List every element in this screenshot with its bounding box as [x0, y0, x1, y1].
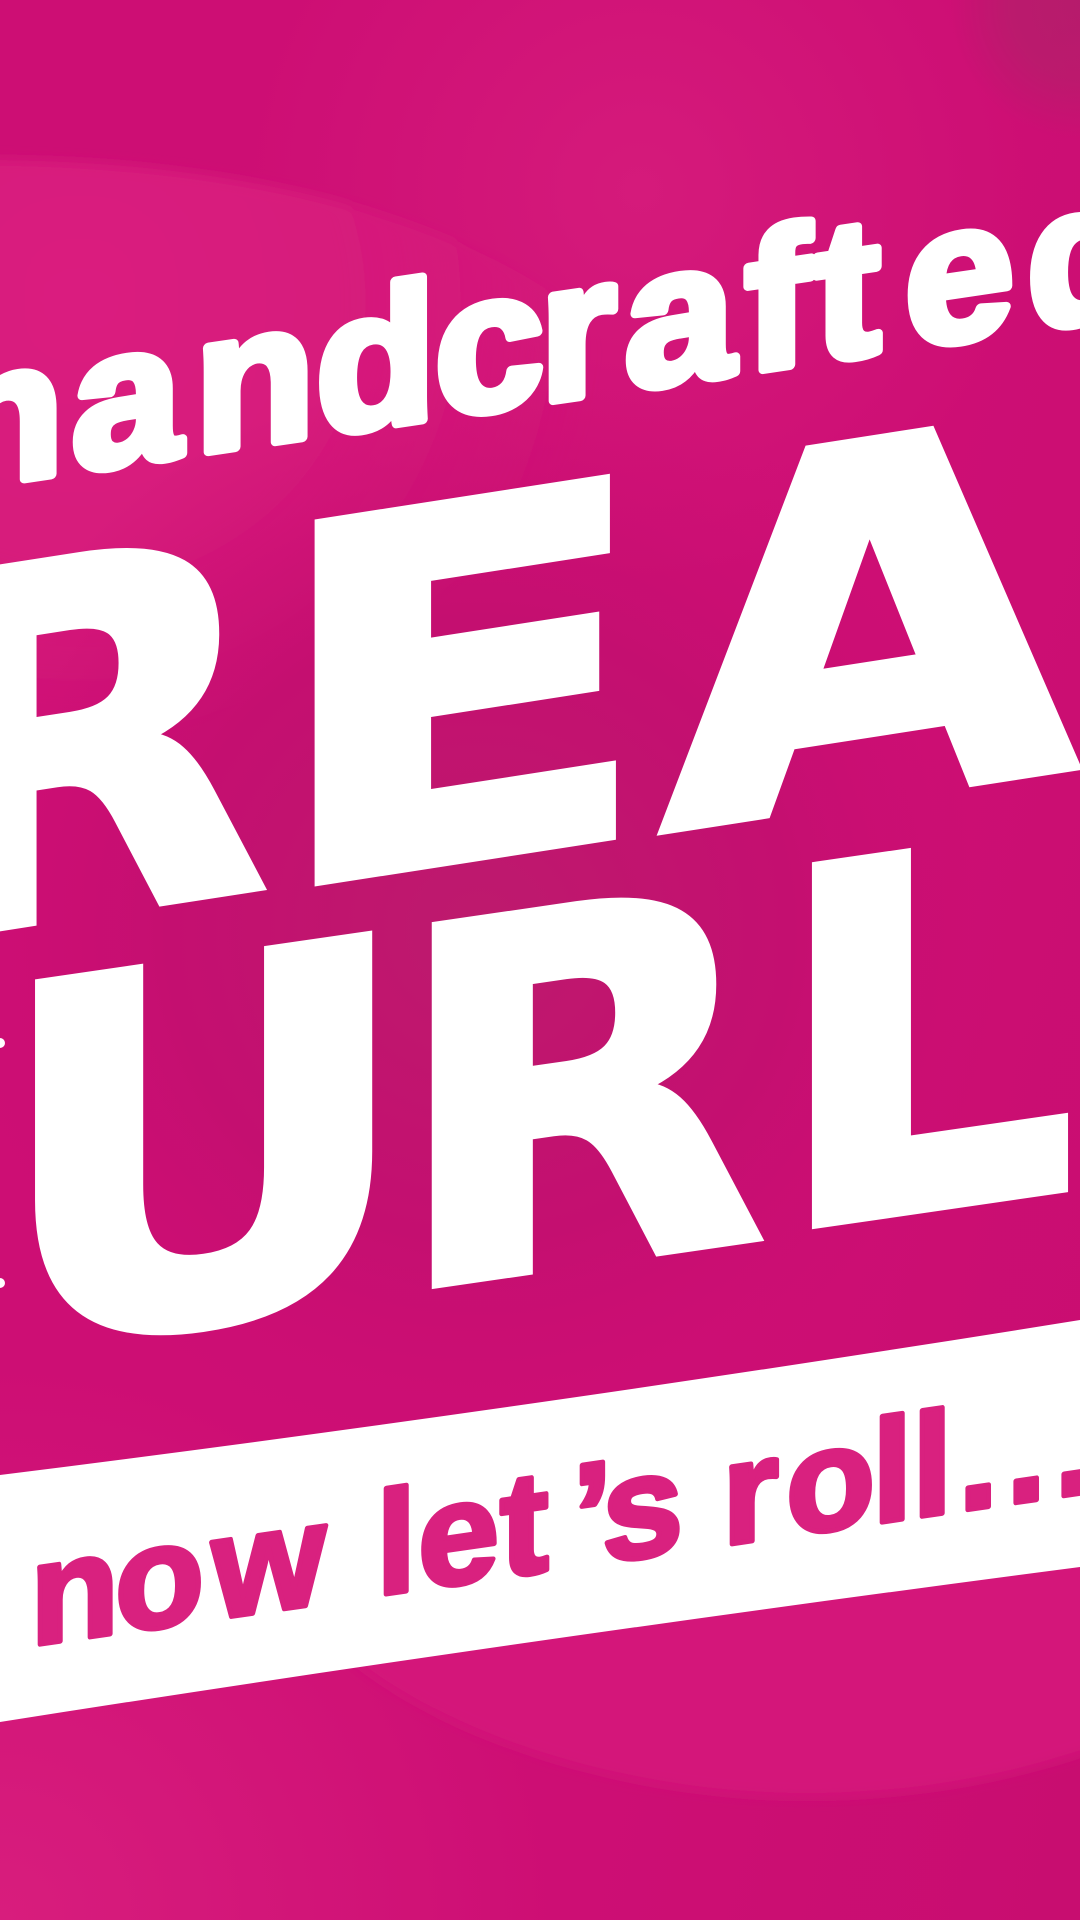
- letter L: L: [773, 731, 1076, 1346]
- banner text: now let's roll...: now let’s roll...: [30, 1360, 1080, 1677]
- letter R: R: [392, 781, 766, 1406]
- white banner: [0, 1320, 1080, 1722]
- headline line 1: REAL: [0, 311, 1080, 1059]
- letter A: A: [662, 311, 1080, 946]
- letter E: E: [269, 374, 651, 1004]
- headline line 2: URL: [0, 731, 1076, 1468]
- letter U: U: [0, 832, 415, 1468]
- left edge glyph remnants: [0, 1038, 5, 1288]
